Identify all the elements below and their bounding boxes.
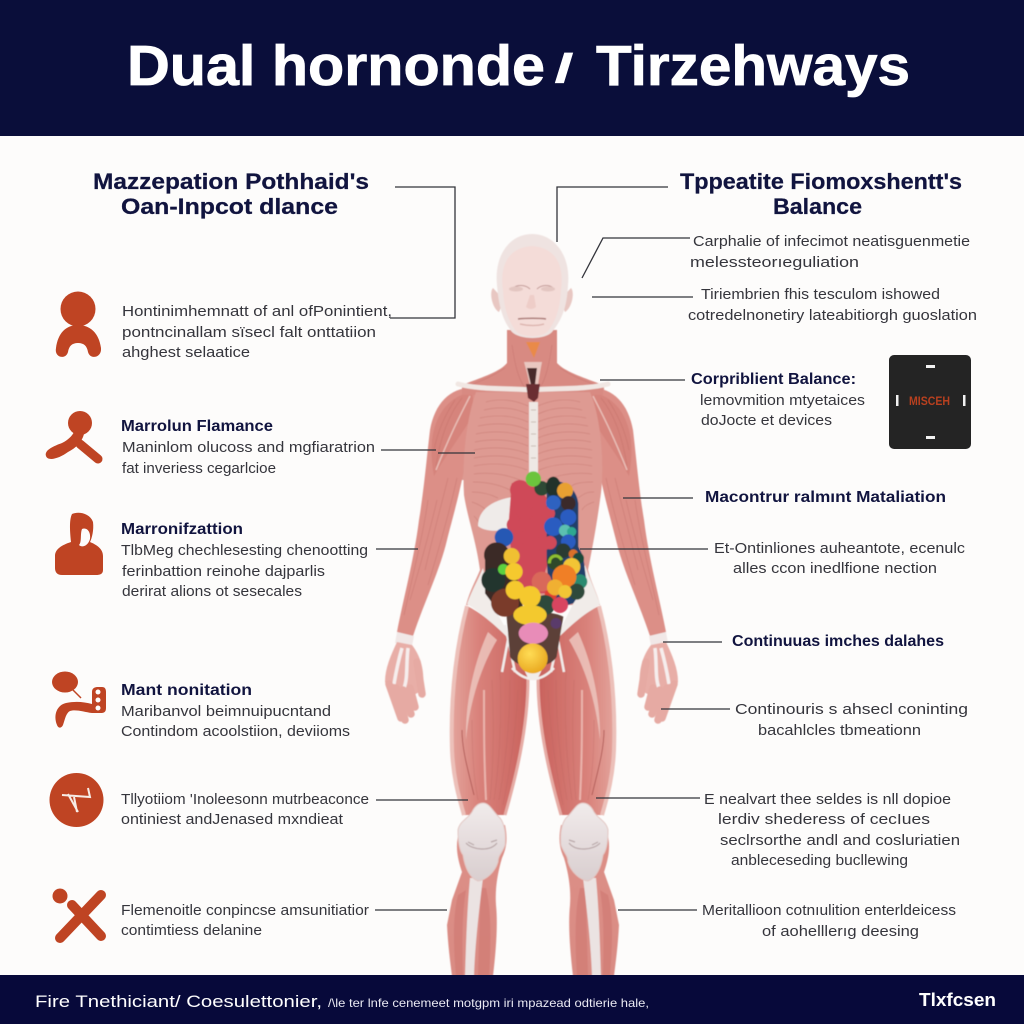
text block: item C: Corpriblient Balance: xyxy=(691,371,856,388)
text block: item H xyxy=(704,792,960,869)
leader line: right heading xyxy=(557,187,668,242)
text block: item 6: contimtiess delanine xyxy=(121,923,262,939)
panel: right column xyxy=(557,169,977,940)
text block: item H: seclrsorthe andl and cosluriatien xyxy=(720,833,960,849)
title: Tirzehways xyxy=(596,34,910,98)
torso and chest muscles xyxy=(464,392,602,605)
heading: right xyxy=(680,169,962,219)
text block: item C xyxy=(691,371,865,429)
text block: item 4: Maribanvol beimnuipucntand xyxy=(121,704,331,720)
heading: left: Mazzepation Pothhaid's xyxy=(93,169,369,194)
text block: item 2: Maninlom olucoss and mgfiaratrion xyxy=(122,440,375,456)
footer banner xyxy=(0,975,1024,1024)
leader line: item I xyxy=(618,909,697,911)
text block: item I: Meritallioon cotnıulition enterldeicess xyxy=(702,903,956,919)
text block: item B: cotredelnonetiry lateabitiorgh guoslation xyxy=(688,308,977,324)
title: Dual hornonde xyxy=(127,34,545,98)
text block: item D: Macontrur ralmınt Mataliation xyxy=(705,489,946,506)
text block: item C: lemovmition mtyetaices xyxy=(700,393,865,409)
heading: left xyxy=(93,169,369,219)
text block: item E xyxy=(714,541,965,577)
text block: item A: melessteorıeguliation xyxy=(690,255,859,271)
text block: item G: Continouris s ahsecl coninting xyxy=(735,702,968,718)
leader line: item 5 xyxy=(376,799,468,801)
right leg xyxy=(538,606,619,976)
right arm xyxy=(585,388,678,720)
pelvis xyxy=(467,565,600,678)
text block: item 1: pontncinallam sïsecl falt onttatiion xyxy=(122,325,376,341)
leader line: left heading xyxy=(390,187,455,318)
text block: item A: Carphalie of infecimot neatisguenmetie xyxy=(693,234,970,250)
leader line: item F xyxy=(663,641,722,643)
footer text: Fire Tnethiciant/ Coesulettonier, xyxy=(35,992,322,1011)
left arm xyxy=(385,388,478,720)
footer text xyxy=(35,992,649,1011)
text block: item E: Et-Ontinliones auheantote, ecenulc xyxy=(714,541,965,557)
colourful abdominal organs xyxy=(481,471,587,673)
heading: right: Balance xyxy=(773,194,862,219)
text block: item 6 xyxy=(121,903,369,939)
header banner xyxy=(0,0,1024,136)
text block: item G: bacahlcles tbmeationn xyxy=(758,723,921,739)
text block: item 5 xyxy=(121,792,369,828)
text block: item 2: fat inveriess cegarlcioe xyxy=(122,461,276,477)
text block: item B: Tiriembrien fhis tesculom ishowed xyxy=(701,287,940,303)
left leg xyxy=(447,606,528,976)
footer text: /\le ter lnfe cenemeet motgpm iri mpazead odtierie hale, xyxy=(328,996,649,1010)
text block: item 4: Contindom acoolstiion, deviioms xyxy=(121,724,350,740)
human anatomy figure xyxy=(385,234,678,976)
icon: circular badge xyxy=(50,773,104,827)
icon: person xyxy=(56,292,101,357)
text block: item F: Continuuas imches dalahes xyxy=(732,633,944,650)
leader line: item H xyxy=(596,797,700,799)
text block: item I xyxy=(702,903,956,940)
text block: item 2: Marrolun Flamance xyxy=(121,418,273,435)
text block: item 1: Hontinimhemnatt of anl ofPonintient, xyxy=(122,304,392,320)
heading: right: Tppeatite Fiomoxshentt's xyxy=(680,169,962,194)
icon: reaching figure xyxy=(46,411,98,459)
text block: item 1: ahghest selaatice xyxy=(122,345,250,361)
text block: item 3 xyxy=(121,521,368,600)
text block: item 3: Marronifzattion xyxy=(121,521,243,538)
text block: item 2 xyxy=(121,418,375,477)
leader line: item D xyxy=(623,497,693,499)
leader line: item B xyxy=(592,296,693,298)
head and face xyxy=(491,234,573,338)
clavicle and sternum xyxy=(458,384,608,474)
text block: item 1 xyxy=(122,304,392,361)
leader line: item 2 xyxy=(381,450,475,453)
icon: cross xyxy=(52,888,101,938)
text block: item 3: ferinbattion reinohe dajparlis xyxy=(122,564,325,580)
text block: item 6: Flemenoitle conpincse amsunitiatior xyxy=(121,903,369,919)
text block: item 4: Mant nonitation xyxy=(121,682,252,699)
heading: left: Oan-Inpcot dlance xyxy=(121,194,338,219)
leader line: item G xyxy=(661,708,730,710)
leader line: item 6 xyxy=(375,909,447,911)
text block: item H: lerdiv shederess of cecIues xyxy=(718,812,930,828)
title: / xyxy=(555,47,573,91)
text block: item A xyxy=(690,234,970,271)
text block: item H: anbleceseding bucllewing xyxy=(731,853,908,869)
text block: item C: doJocte et devices xyxy=(701,413,832,429)
text block: item 3: derirat alions ot sesecales xyxy=(122,584,302,600)
leader line: item C xyxy=(600,379,685,381)
pelvic ligaments xyxy=(502,625,564,679)
neck and trapezius xyxy=(462,330,603,395)
text block: item H: E nealvart thee seldes is nll dopioe xyxy=(704,792,951,808)
upper torso backing xyxy=(460,386,606,480)
footer logo: Tlxfcsen xyxy=(919,990,996,1010)
text block: item B xyxy=(688,287,977,324)
text block: item E: alles ccon inedlfione nection xyxy=(733,561,937,577)
leader line: item 3 xyxy=(376,548,418,550)
panel: left column xyxy=(46,169,475,939)
leader line: item A xyxy=(582,238,690,278)
text block: item 5: Tllyotiiom 'Inoleesonn mutrbeaconce xyxy=(121,792,369,808)
title xyxy=(127,34,910,98)
icon: black device: MISCEH xyxy=(909,394,950,408)
text block: item 4 xyxy=(121,682,350,740)
text block: item 5: ontiniest andJenased mxndieat xyxy=(121,812,343,828)
icon: portrait xyxy=(55,513,103,575)
leader line: item E xyxy=(580,548,708,550)
text block: item 3: TlbMeg chechlesesting chenootting xyxy=(121,543,368,559)
icon: monitoring device xyxy=(52,672,106,728)
text block: item G xyxy=(735,702,968,739)
text block: item I: of aohelllerıg deesing xyxy=(762,924,919,940)
icon: black device xyxy=(889,355,971,449)
